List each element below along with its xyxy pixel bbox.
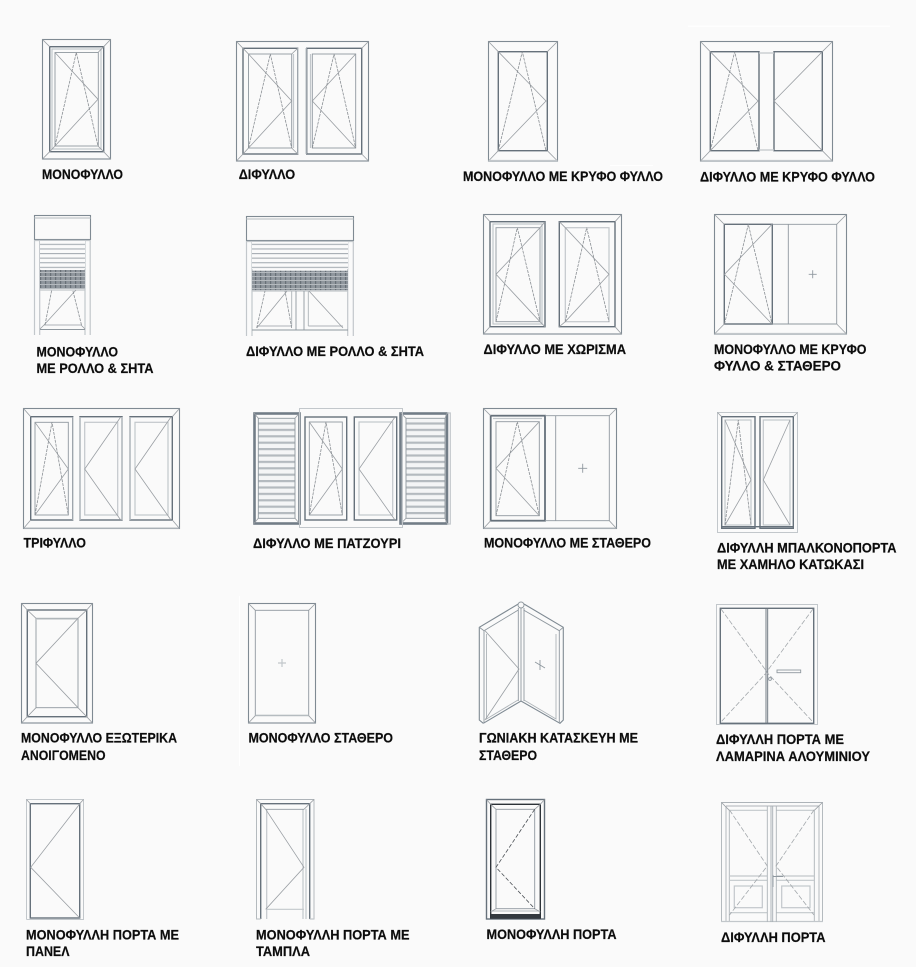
- label: ΔΙΦΥΛΛΟ ΜΕ ΠΑΤΖΟΥΡΙ: [253, 536, 401, 551]
- icon: door handle bar: [777, 670, 801, 673]
- icon: hidden-leaf window with fixed pane: [714, 214, 846, 334]
- panel: ΔΙΦΥΛΛΗ ΠΟΡΤΑ ΜΕ ΛΑΜΑΡΙΝΑ ΑΛΟΥΜΙΝΙΟΥ: [716, 604, 870, 764]
- label: ΔΙΦΥΛΛΟ ΜΕ ΡΟΛΛΟ & ΣΗΤΑ: [246, 344, 424, 359]
- icon: double window with mullion: [484, 214, 622, 334]
- label: ΣΤΑΘΕΡΟ: [479, 748, 537, 763]
- label: [256, 927, 410, 959]
- label: ΦΥΛΛΟ & ΣΤΑΘΕΡΟ: [714, 359, 841, 374]
- label: [717, 540, 897, 572]
- label: [716, 732, 870, 764]
- icon: double door with lower panels: [721, 802, 823, 922]
- panel: ΔΙΦΥΛΛΗ ΜΠΑΛΚΟΝΟΠΟΡΤΑ ΜΕ ΧΑΜΗΛΟ ΚΑΤΩΚΑΣΙ: [717, 412, 897, 572]
- label: ΜΟΝΟΦΥΛΛΗ ΠΟΡΤΑ ΜΕ: [26, 927, 179, 942]
- panel: ΜΟΝΟΦΥΛΛΟ ΜΕ ΣΤΑΘΕΡΟ: [484, 408, 651, 551]
- icon: single door with transom panel: [256, 800, 314, 920]
- panel: ΜΟΝΟΦΥΛΛΟ ΜΕ ΚΡΥΦΟ ΦΥΛΛΟ: [463, 42, 663, 184]
- label: ΔΙΦΥΛΛΟ ΜΕ ΚΡΥΦΟ ΦΥΛΛΟ: [700, 170, 875, 184]
- label: ΜΟΝΟΦΥΛΛΟ ΣΤΑΘΕΡΟ: [248, 731, 393, 746]
- label: [36, 345, 154, 376]
- icon: single window with fixed pane: [484, 408, 616, 528]
- panel: ΜΟΝΟΦΥΛΛΗ ΠΟΡΤΑ ΜΕ ΤΑΜΠΛΑ: [256, 800, 410, 959]
- label: [21, 731, 177, 763]
- label: ΔΙΦΥΛΛΟ ΜΕ ΧΩΡΙΣΜΑ: [484, 342, 626, 357]
- label: ΜΕ ΡΟΛΛΟ & ΣΗΤΑ: [36, 361, 154, 376]
- panel: ΜΟΝΟΦΥΛΛΟ ΜΕ ΡΟΛΛΟ & ΣΗΤΑ: [34, 216, 154, 376]
- panel: ΔΙΦΥΛΛΟ: [236, 42, 368, 182]
- icon: double hidden-leaf window: [700, 42, 832, 161]
- icon: single door with panel: [26, 800, 84, 920]
- label: ΔΙΦΥΛΛΗ ΠΟΡΤΑ: [721, 930, 826, 945]
- icon: fixed window: [248, 604, 316, 723]
- panel: ΔΙΦΥΛΛΟ ΜΕ ΧΩΡΙΣΜΑ: [484, 214, 626, 357]
- icon: corner construction with fixed pane: [479, 602, 563, 723]
- icon: left shutter: [254, 413, 300, 524]
- icon: fixed pane cross: [535, 660, 545, 670]
- icon: single door: [486, 800, 544, 919]
- panel: ΜΟΝΟΦΥΛΛΗ ΠΟΡΤΑ ΜΕ ΠΑΝΕΛ: [26, 800, 179, 959]
- label: ΤΑΜΠΛΑ: [256, 944, 310, 959]
- icon: single hidden-leaf window: [488, 42, 558, 161]
- label: ΜΟΝΟΦΥΛΛΟ: [36, 345, 118, 360]
- panel: ΤΡΙΦΥΛΛΟ: [24, 408, 180, 551]
- label: ΜΟΝΟΦΥΛΛΟ ΜΕ ΣΤΑΘΕΡΟ: [484, 536, 651, 551]
- label: ΑΝΟΙΓΟΜΕΝΟ: [21, 748, 106, 763]
- panel: ΓΩΝΙΑΚΗ ΚΑΤΑΣΚΕΥΗ ΜΕ ΣΤΑΘΕΡΟ: [479, 602, 638, 763]
- label: ΜΟΝΟΦΥΛΛΟ ΜΕ ΚΡΥΦΟ ΦΥΛΛΟ: [463, 169, 663, 184]
- panel: ΜΟΝΟΦΥΛΛΟ ΕΞΩΤΕΡΙΚΑ ΑΝΟΙΓΟΜΕΝΟ: [21, 604, 177, 763]
- panel: ΜΟΝΟΦΥΛΛΟ: [42, 40, 123, 182]
- label: ΔΙΦΥΛΛΟ: [239, 167, 295, 182]
- label: ΜΟΝΟΦΥΛΛΟ ΜΕ ΚΡΥΦΟ: [714, 342, 866, 357]
- icon: right shutter: [400, 413, 450, 524]
- label: [479, 731, 638, 763]
- icon: triple-leaf window: [24, 408, 180, 528]
- label: ΔΙΦΥΛΛΗ ΠΟΡΤΑ ΜΕ: [716, 732, 844, 747]
- label: ΜΟΝΟΦΥΛΛΟ ΕΞΩΤΕΡΙΚΑ: [21, 731, 177, 746]
- panel: ΔΙΦΥΛΛΟ ΜΕ ΚΡΥΦΟ ΦΥΛΛΟ: [700, 42, 875, 184]
- icon: single-leaf window: [42, 40, 110, 159]
- icon: outward-opening window: [22, 604, 92, 723]
- label: [714, 342, 866, 374]
- label: ΜΟΝΟΦΥΛΛΟ: [42, 167, 123, 182]
- icon: fixed pane cross: [809, 270, 817, 278]
- icon: double-leaf window: [236, 42, 368, 161]
- label: ΜΟΝΟΦΥΛΛΗ ΠΟΡΤΑ ΜΕ: [256, 927, 410, 942]
- icon: double window with roller and screen: [246, 216, 354, 336]
- panel: ΜΟΝΟΦΥΛΛΗ ΠΟΡΤΑ: [486, 800, 617, 942]
- label: ΤΡΙΦΥΛΛΟ: [24, 536, 86, 551]
- label: ΜΟΝΟΦΥΛΛΗ ΠΟΡΤΑ: [486, 927, 617, 942]
- label: ΓΩΝΙΑΚΗ ΚΑΤΑΣΚΕΥΗ ΜΕ: [479, 731, 638, 746]
- panel: ΔΙΦΥΛΛΟ ΜΕ ΡΟΛΛΟ & ΣΗΤΑ: [246, 216, 424, 359]
- label: ΜΕ ΧΑΜΗΛΟ ΚΑΤΩΚΑΣΙ: [717, 557, 864, 572]
- icon: fixed pane cross: [278, 659, 286, 667]
- icon: double window with shutters: [254, 408, 450, 528]
- label: ΔΙΦΥΛΛΗ ΜΠΑΛΚΟΝΟΠΟΡΤΑ: [717, 540, 897, 555]
- icon: double balcony door: [718, 412, 798, 532]
- icon: fixed pane cross: [578, 464, 587, 473]
- panel: ΔΙΦΥΛΛΗ ΠΟΡΤΑ: [721, 802, 826, 945]
- label: ΛΑΜΑΡΙΝΑ ΑΛΟΥΜΙΝΙΟΥ: [716, 749, 870, 764]
- label: [26, 927, 179, 959]
- icon: single window with roller and screen: [34, 216, 90, 335]
- panel: ΔΙΦΥΛΛΟ ΜΕ ΠΑΤΖΟΥΡΙ: [253, 408, 450, 551]
- label: ΠΑΝΕΛ: [26, 944, 70, 959]
- icon: door handle: [773, 875, 783, 887]
- panel: ΜΟΝΟΦΥΛΛΟ ΜΕ ΚΡΥΦΟ ΦΥΛΛΟ & ΣΤΑΘΕΡΟ: [714, 214, 866, 374]
- icon: double aluminium-sheet door: [716, 604, 818, 724]
- panel: ΜΟΝΟΦΥΛΛΟ ΣΤΑΘΕΡΟ: [248, 604, 393, 746]
